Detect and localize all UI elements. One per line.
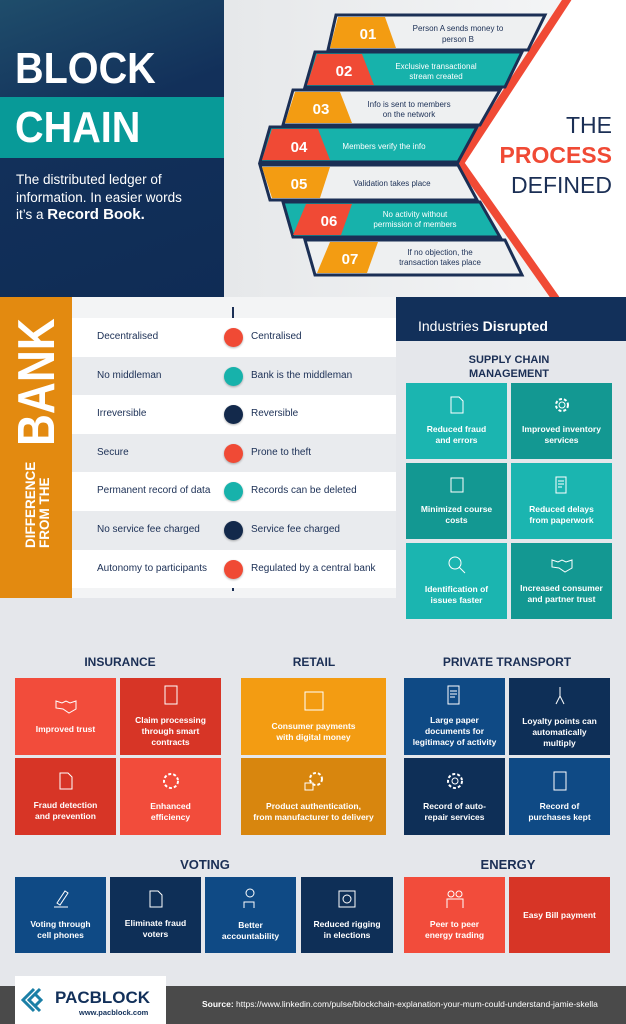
panel: retail: with digital money [276, 732, 351, 742]
step 01: Person A sends money to [413, 24, 504, 33]
heading: the process defined: THE [566, 112, 612, 138]
step 02 [305, 52, 522, 87]
panel: insurance: Claim processing [135, 715, 206, 725]
panel: voting: cell phones [37, 930, 84, 940]
supply chain grid: and errors [435, 435, 478, 445]
heading: private transport: PRIVATE TRANSPORT [443, 655, 571, 669]
panel: private transport: multiply [543, 738, 576, 748]
panel: industries disrupted [396, 297, 626, 627]
step 04 [260, 127, 477, 162]
top left panel [0, 0, 224, 297]
panel: insurance: through smart [142, 726, 199, 736]
panel: retail: Product authentication, [266, 800, 361, 810]
comparison rows: Secure [97, 447, 129, 458]
panel: voting: voters [143, 929, 168, 939]
comparison rows: Regulated by a central bank [251, 563, 376, 574]
panel: voting: Better [238, 920, 263, 930]
heading: retail: RETAIL [293, 655, 335, 669]
panel: energy [404, 877, 610, 953]
panel: voting: in elections [324, 930, 370, 940]
comparison rows: Service fee charged [251, 524, 340, 535]
teal band with title chain: CHAIN [15, 103, 140, 152]
panel: difference from the bank [0, 297, 396, 598]
step 03: 03 [313, 101, 329, 118]
step 07 [305, 240, 522, 275]
comparison rows: Centralised [251, 331, 302, 342]
step 02: 02 [336, 63, 352, 80]
side title: DIFFERENCE [23, 462, 38, 548]
panel: private transport: Record of [540, 800, 579, 810]
supply chain grid: Reduced delays [529, 504, 594, 514]
supply chain grid: and partner trust [527, 594, 596, 604]
heading: the process defined: DEFINED [511, 172, 612, 198]
logo: PACBLOCK [55, 988, 150, 1007]
comparison rows: No middleman [97, 370, 161, 381]
panel: retail: Consumer payments [271, 720, 356, 730]
step 07: 07 [342, 251, 358, 268]
logo: www.pacblock.com [79, 1008, 148, 1017]
panel: insurance: efficiency [151, 812, 190, 822]
panel: energy: energy trading [425, 930, 484, 940]
panel: retail [241, 678, 386, 835]
step 04: 04 [291, 139, 308, 156]
step 03: Info is sent to members [367, 100, 451, 109]
step 05: 05 [291, 176, 307, 193]
panel: private transport: Loyalty points can [522, 716, 597, 726]
supply chain grid [406, 383, 612, 619]
step 03 [283, 90, 500, 125]
panel: insurance [15, 678, 221, 835]
supply chain grid: Reduced fraud [427, 424, 486, 434]
panel: private transport: Large paper [430, 715, 479, 725]
panel: insurance: Improved trust [36, 724, 95, 734]
step 02: stream created [409, 72, 463, 81]
panel: voting: Reduced rigging [313, 919, 381, 929]
step 01: 01 [360, 26, 376, 43]
step 07: transaction takes place [399, 258, 481, 267]
logo [15, 976, 166, 1024]
step 06: 06 [321, 213, 337, 230]
comparison rows: Reversible [251, 408, 298, 419]
step 07: If no objection, the [407, 248, 473, 257]
panel: insurance: Enhanced [150, 800, 191, 810]
panel: private transport [404, 678, 610, 835]
step 06 [283, 202, 500, 237]
step 06: permission of members [373, 220, 457, 229]
step 05 [260, 165, 477, 200]
supply chain grid: Increased consumer [520, 583, 603, 593]
comparison rows: Prone to theft [251, 447, 311, 458]
comparison rows: Decentralised [97, 331, 158, 342]
panel: energy: Peer to peer [430, 919, 479, 929]
side title: FROM THE [37, 478, 52, 548]
title: block: BLOCK [15, 44, 156, 93]
panel: private transport: purchases kept [528, 812, 591, 822]
footer [0, 986, 626, 1024]
panel: insurance: and prevention [35, 810, 96, 820]
heading: energy: ENERGY [481, 857, 535, 872]
supply chain grid: Identification of [425, 584, 488, 594]
process panel [224, 0, 626, 297]
panel: insurance: contracts [151, 737, 190, 747]
panel: private transport: automatically [532, 727, 587, 737]
panel: private transport: legitimacy of activity [413, 737, 496, 747]
supply chain grid: Improved inventory [522, 424, 601, 434]
comparison rows: Permanent record of data [97, 485, 210, 496]
source text: Source: https://www.linkedin.com/pulse/blockchain-explanation-your-mum-could-understand-jamie-skella [202, 999, 598, 1009]
heading: insurance: INSURANCE [84, 655, 156, 669]
heading: voting: VOTING [180, 857, 230, 872]
heading: the process defined [500, 112, 612, 198]
timeline line [232, 307, 234, 591]
panel: retail: from manufacturer to delivery [253, 812, 374, 822]
comparison rows: Irreversible [97, 408, 146, 419]
panel: insurance: Fraud detection [34, 800, 97, 810]
heading: the process defined: PROCESS [500, 142, 612, 168]
comparison rows: Records can be deleted [251, 485, 357, 496]
comparison rows: Bank is the middleman [251, 370, 352, 381]
supply chain grid: from paperwork [529, 515, 594, 525]
step 05: Validation takes place [353, 179, 431, 188]
description text: The distributed ledger of information. In easier words it’s a Record Book. [16, 172, 182, 223]
step 01: person B [442, 35, 474, 44]
supply chain grid: Minimized course [421, 504, 492, 514]
step 06: No activity without [383, 210, 448, 219]
panel: voting: Eliminate fraud [125, 918, 186, 928]
step 04: Members verify the info [342, 142, 426, 151]
supply chain grid: services [544, 435, 579, 445]
comparison rows: No service fee charged [97, 524, 200, 535]
step 01 [328, 15, 545, 50]
supply chain grid: costs [445, 515, 468, 525]
step 03: on the network [383, 110, 436, 119]
supply chain heading: SUPPLY CHAIN MANAGEMENT [469, 354, 549, 380]
comparison rows [72, 318, 396, 588]
side title: BANK [8, 318, 66, 446]
header: Industries Disrupted [418, 318, 548, 334]
panel: voting: accountability [222, 931, 279, 941]
panel: private transport: documents for [425, 726, 484, 736]
teal band with title chain [0, 97, 224, 158]
step 02: Exclusive transactional [395, 62, 477, 71]
panel: private transport: Record of auto- [423, 800, 486, 810]
panel: energy: Easy Bill payment [523, 910, 596, 920]
supply chain grid: issues faster [430, 595, 482, 605]
side title [0, 297, 72, 598]
comparison rows: Autonomy to participants [97, 563, 207, 574]
panel: voting [15, 877, 393, 953]
header [396, 297, 626, 341]
panel: private transport: repair services [424, 812, 485, 822]
panel: voting: Voting through [30, 919, 91, 929]
